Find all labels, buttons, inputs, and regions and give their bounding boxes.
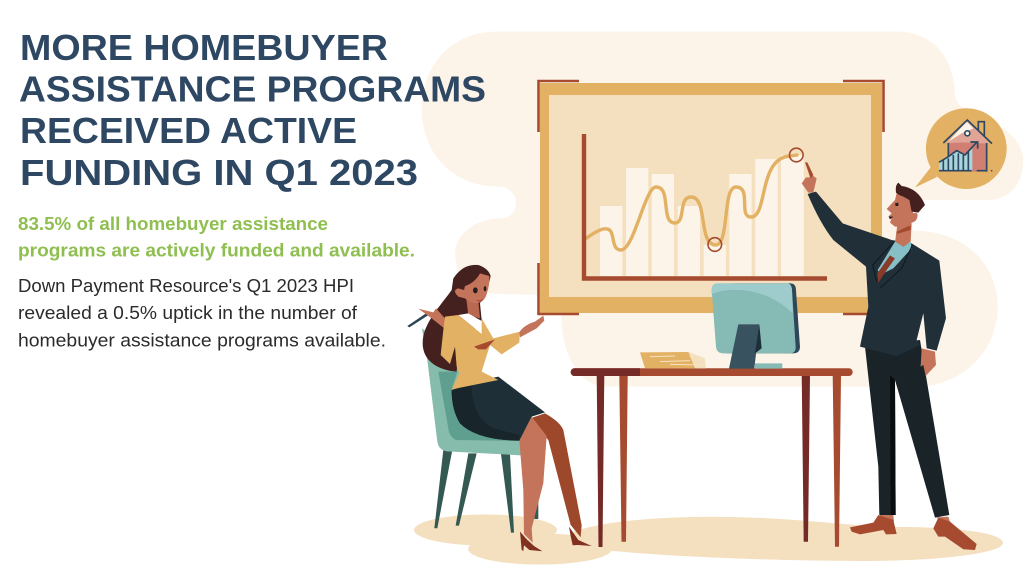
upper body xyxy=(802,162,946,356)
hair xyxy=(896,183,925,213)
bubble xyxy=(926,108,1007,189)
green highlight text: 83.5% of all homebuyer assistance xyxy=(18,213,328,234)
eye and mouth xyxy=(889,203,898,219)
front leg xyxy=(519,417,547,543)
stack of papers xyxy=(640,352,706,368)
neck xyxy=(895,223,912,247)
desk xyxy=(571,368,853,547)
computer monitor xyxy=(712,283,800,369)
left hand holding pen xyxy=(407,313,428,327)
body text: revealed a 0.5% uptick in the number of xyxy=(18,302,358,323)
chart high marker xyxy=(790,148,803,162)
house chart icon xyxy=(939,120,992,172)
presentation board xyxy=(538,81,884,314)
left shoe xyxy=(850,515,897,534)
man figure xyxy=(802,162,977,550)
neck xyxy=(466,297,480,318)
hair back xyxy=(423,265,491,372)
body text xyxy=(18,275,386,350)
right shoe xyxy=(933,518,977,550)
board panel xyxy=(549,95,871,297)
corner brackets xyxy=(538,81,884,314)
chart axes xyxy=(584,134,827,278)
blouse collar xyxy=(458,313,482,334)
forearm hand on jacket xyxy=(474,339,495,349)
lapels xyxy=(873,242,912,288)
bar chart xyxy=(600,155,804,276)
sock xyxy=(880,515,950,522)
tie xyxy=(877,255,895,283)
face xyxy=(455,273,489,303)
trend line xyxy=(587,155,797,250)
desk top xyxy=(571,368,853,376)
title: FUNDING IN Q1 2023 xyxy=(20,152,418,193)
background cream blob xyxy=(422,32,1023,387)
pointing hand xyxy=(802,168,817,193)
speech bubble with house icon xyxy=(915,108,1007,189)
jacket xyxy=(808,192,946,356)
ground shadows xyxy=(414,514,1003,564)
head xyxy=(887,193,918,227)
body text: Down Payment Resource's Q1 2023 HPI xyxy=(18,275,354,296)
shirt xyxy=(878,242,912,275)
skirt xyxy=(452,377,545,441)
title: ASSISTANCE PROGRAMS xyxy=(19,68,486,110)
title xyxy=(19,27,486,193)
trousers xyxy=(850,340,977,550)
yellow jacket xyxy=(441,315,520,389)
back shoe xyxy=(569,527,592,546)
hand at hip xyxy=(921,348,936,376)
green highlight text: programs are actively funded and available. xyxy=(18,240,415,260)
green highlight text xyxy=(18,213,415,260)
woman figure xyxy=(407,265,592,551)
eyes and mouth xyxy=(473,286,486,293)
board frame xyxy=(540,83,882,313)
right hand xyxy=(519,316,544,337)
back leg xyxy=(530,413,582,537)
chair xyxy=(422,329,538,533)
title: MORE HOMEBUYER xyxy=(20,27,388,68)
body text: homebuyer assistance programs available. xyxy=(18,330,386,350)
desk legs xyxy=(597,375,810,547)
bubble tail xyxy=(915,167,937,188)
chart low marker xyxy=(708,238,722,251)
front high heel xyxy=(520,532,542,551)
title: RECEIVED ACTIVE xyxy=(20,110,357,151)
